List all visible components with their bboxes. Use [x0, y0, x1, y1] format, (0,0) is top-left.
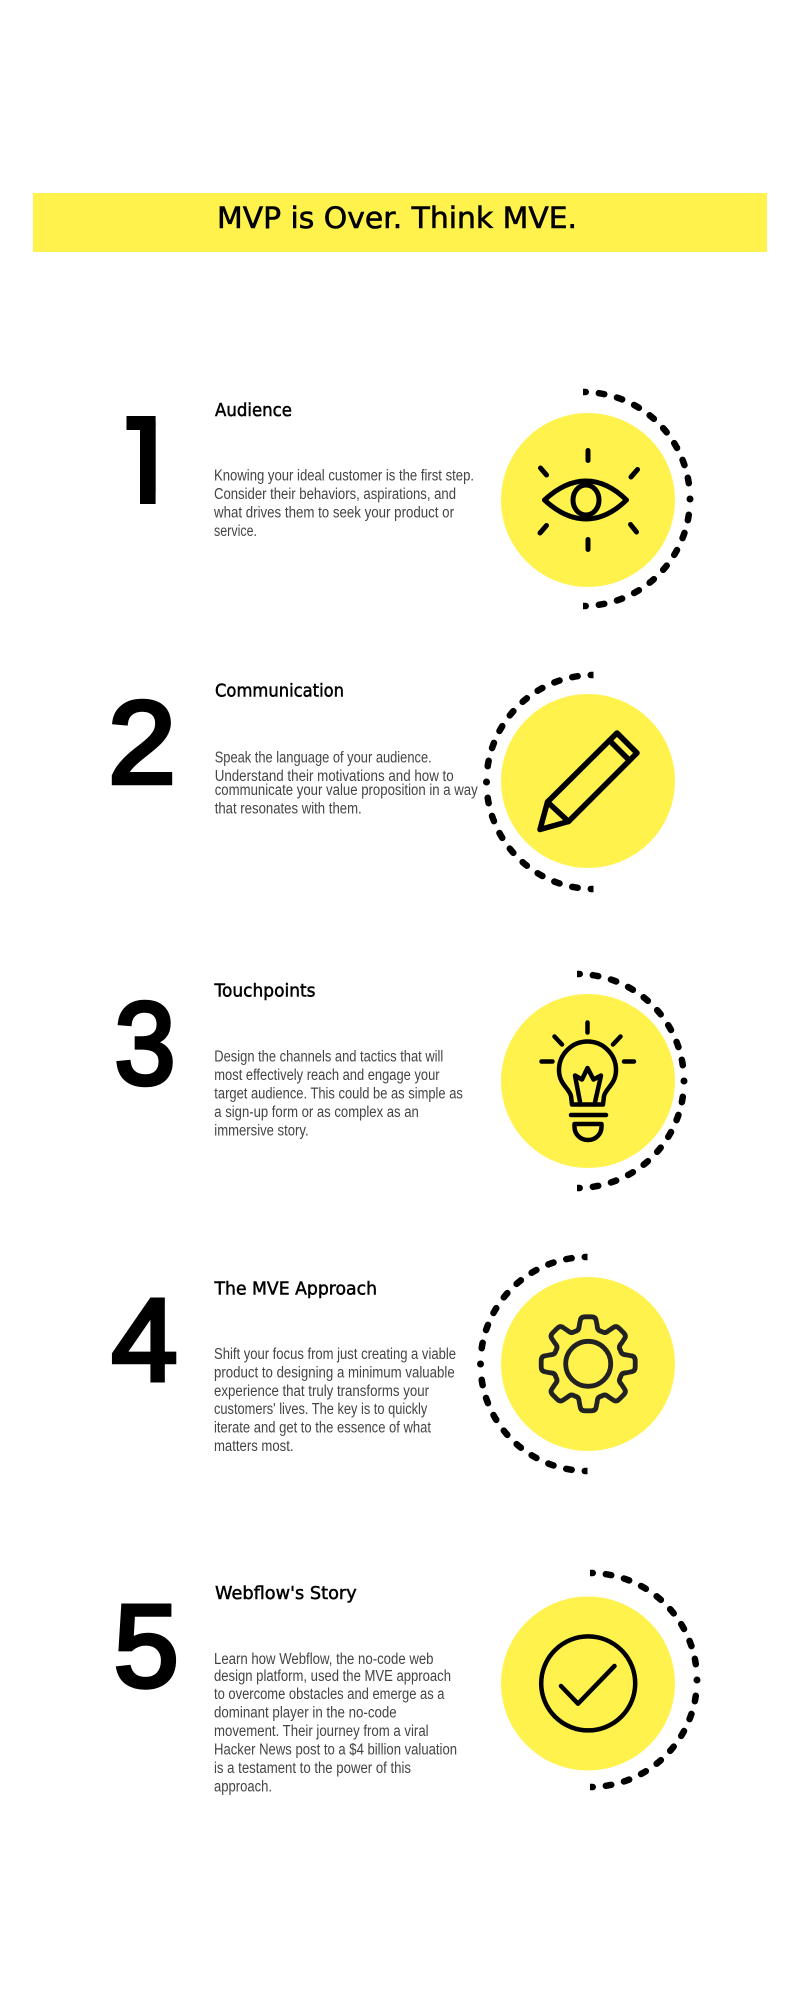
- body text: the mve approach: experience that truly transforms your: [214, 1383, 429, 1400]
- yellow circle 1: [501, 413, 675, 587]
- body text: webflow's story: is a testament to the power of this: [214, 1760, 411, 1777]
- dashed arc 4: [477, 1257, 588, 1471]
- yellow circle 5: [501, 1596, 675, 1770]
- number 3: 3: [114, 978, 176, 1109]
- body text: webflow's story: to overcome obstacles and emerge as a: [214, 1686, 445, 1703]
- body text: webflow's story: design platform, used the MVE approach: [214, 1668, 451, 1685]
- dashed arc 3: [577, 974, 688, 1188]
- yellow circle 4: [501, 1277, 675, 1451]
- icon: gear: [541, 1317, 635, 1411]
- body text: communication: Understand their motivations and how to: [215, 768, 454, 785]
- body text: audience: [213, 468, 474, 540]
- body text: webflow's story: dominant player in the no-code: [214, 1705, 397, 1722]
- dashed arc 5: [590, 1573, 700, 1787]
- body text: the mve approach: Shift your focus from just creating a viable: [214, 1346, 456, 1363]
- body text: webflow's story: Learn how Webflow, the no-code web: [214, 1651, 434, 1668]
- body text: touchpoints: Design the channels and tactics that will: [214, 1048, 443, 1066]
- body text: the mve approach: matters most.: [214, 1438, 294, 1455]
- body text: the mve approach: product to designing a minimum valuable: [214, 1364, 455, 1381]
- body text: communication: communicate your value proposition in a way: [215, 782, 478, 799]
- body text: webflow's story: approach.: [214, 1778, 272, 1795]
- body text: the mve approach: [214, 1346, 456, 1455]
- body text: touchpoints: target audience. This could be as simple as: [214, 1086, 463, 1102]
- body text: the mve approach: customers' lives. The key is to quickly: [214, 1401, 428, 1418]
- dashed arc 1: [583, 392, 694, 606]
- heading: communication: Communication: [215, 681, 344, 702]
- body text: webflow's story: Hacker News post to a $4 billion valuation: [214, 1741, 457, 1758]
- infographic canvas: [33, 193, 767, 1795]
- icon: check mark in circle: [541, 1636, 635, 1730]
- panel: step 5 webflow's story: [114, 1573, 700, 1795]
- title banner: [33, 193, 767, 252]
- heading: the mve approach: The MVE Approach: [214, 1279, 377, 1300]
- body text: audience: Knowing your ideal customer is the first step.: [214, 468, 474, 485]
- body text: webflow's story: [214, 1651, 457, 1795]
- body text: communication: that resonates with them.: [215, 800, 362, 817]
- yellow circle 3: [501, 994, 675, 1168]
- body text: touchpoints: immersive story.: [214, 1122, 309, 1140]
- number 1: 1: [120, 398, 185, 529]
- icon: pencil: [540, 733, 637, 830]
- body text: audience: Consider their behaviors, aspirations, and: [214, 486, 456, 503]
- heading: audience: Audience: [215, 400, 292, 421]
- number 5: 5: [114, 1580, 179, 1712]
- body text: touchpoints: most effectively reach and engage your: [214, 1067, 440, 1084]
- title banner: MVP is Over. Think MVE.: [217, 201, 577, 235]
- body text: the mve approach: iterate and get to the essence of what: [214, 1420, 432, 1437]
- number 1: [126, 416, 156, 504]
- body text: audience: what drives them to seek your product or: [213, 505, 454, 522]
- number 4: 4: [112, 1274, 178, 1405]
- dashed arc 2: [483, 675, 594, 889]
- body text: touchpoints: [214, 1048, 463, 1140]
- body text: communication: [215, 750, 478, 817]
- body text: touchpoints: a sign-up form or as complex as an: [214, 1104, 419, 1121]
- heading: touchpoints: Touchpoints: [214, 981, 316, 1002]
- body text: audience: service.: [214, 523, 257, 540]
- icon: light bulb: [542, 1022, 634, 1140]
- number 2: 2: [108, 677, 176, 808]
- panel: step 2 communication: [108, 675, 675, 889]
- panel: step 1 audience: [120, 392, 694, 606]
- heading: webflow's story: Webflow's Story: [215, 1583, 357, 1604]
- yellow circle 2: [501, 694, 675, 868]
- icon: eye: [540, 450, 638, 550]
- body text: communication: Speak the language of your audience.: [215, 750, 432, 767]
- panel: step 3 touchpoints: [114, 974, 688, 1188]
- panel: step 4 the mve approach: [112, 1257, 675, 1471]
- body text: webflow's story: movement. Their journey from a viral: [214, 1723, 429, 1740]
